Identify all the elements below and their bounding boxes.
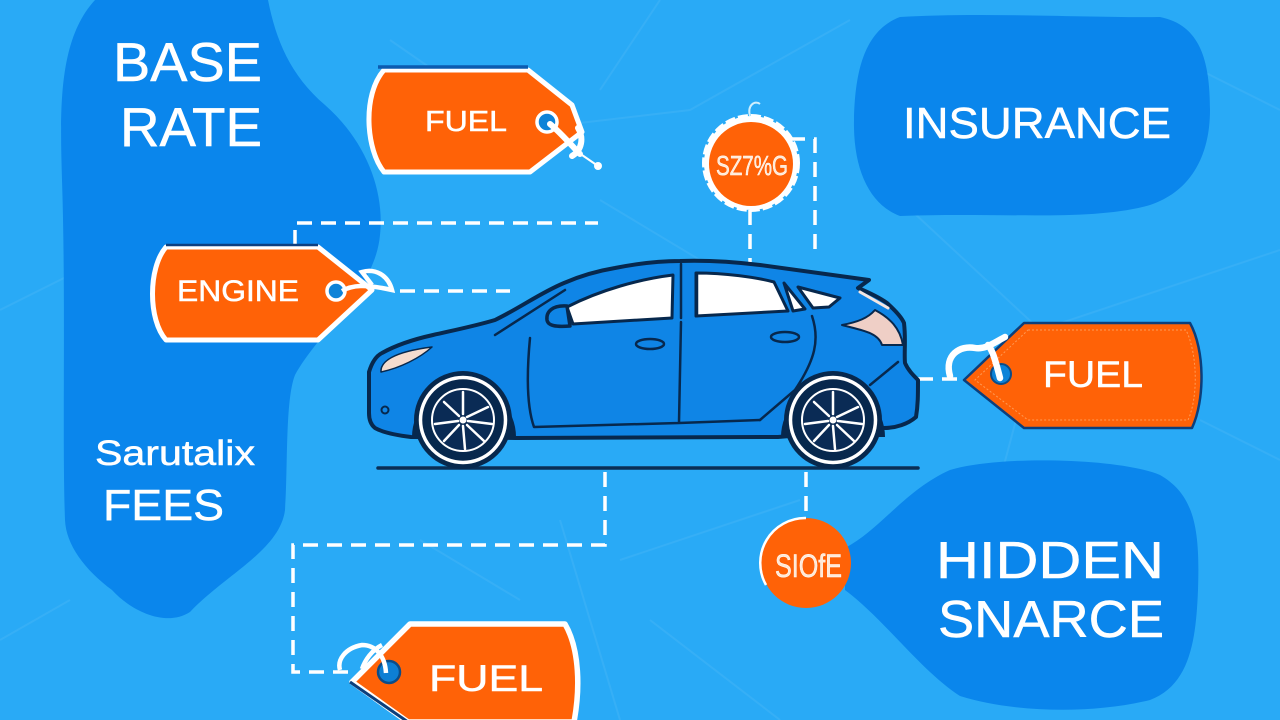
rear wheel — [781, 371, 885, 469]
badge: top price — [704, 103, 798, 210]
heading: hidden: HIDDEN — [936, 532, 1164, 590]
label: fuel: FUEL — [1043, 354, 1143, 395]
label: fuel: FUEL — [429, 658, 543, 699]
panel: hidden insurance — [845, 460, 1198, 710]
label: price: SZ7%G — [716, 150, 788, 181]
tag: fuel right — [949, 323, 1202, 428]
label: engine: ENGINE — [177, 275, 299, 308]
windows — [567, 273, 840, 324]
heading: hidden — [936, 532, 1164, 649]
text: garbled fees label — [95, 434, 256, 530]
heading: insurance: INSURANCE — [903, 99, 1171, 148]
panel: insurance — [854, 15, 1210, 216]
text: garbled fees label: Sarutalix — [95, 434, 256, 473]
text: garbled fees label: FEES — [103, 481, 224, 530]
headlight — [381, 347, 432, 372]
heading: base rate: RATE — [120, 96, 262, 158]
badge: bottom price — [760, 518, 851, 608]
car illustration — [369, 261, 918, 469]
door handles — [636, 332, 799, 349]
label: price: SIOfE — [775, 548, 842, 584]
heading: base rate — [113, 31, 262, 158]
heading: hidden: SNARCE — [938, 591, 1164, 649]
heading: base rate: BASE — [113, 31, 262, 93]
label: fuel: FUEL — [425, 106, 507, 138]
dashed connectors — [293, 139, 960, 672]
tail light — [842, 310, 903, 345]
tag: fuel bottom — [339, 624, 578, 720]
tag: engine — [152, 245, 392, 340]
ground shadow — [378, 466, 918, 470]
door and trim lines — [495, 264, 898, 427]
front wheel — [412, 371, 516, 469]
mirror — [547, 306, 570, 326]
car body — [369, 261, 918, 438]
panel: base rate and fees — [61, 0, 381, 618]
tag: fuel top — [369, 67, 602, 172]
